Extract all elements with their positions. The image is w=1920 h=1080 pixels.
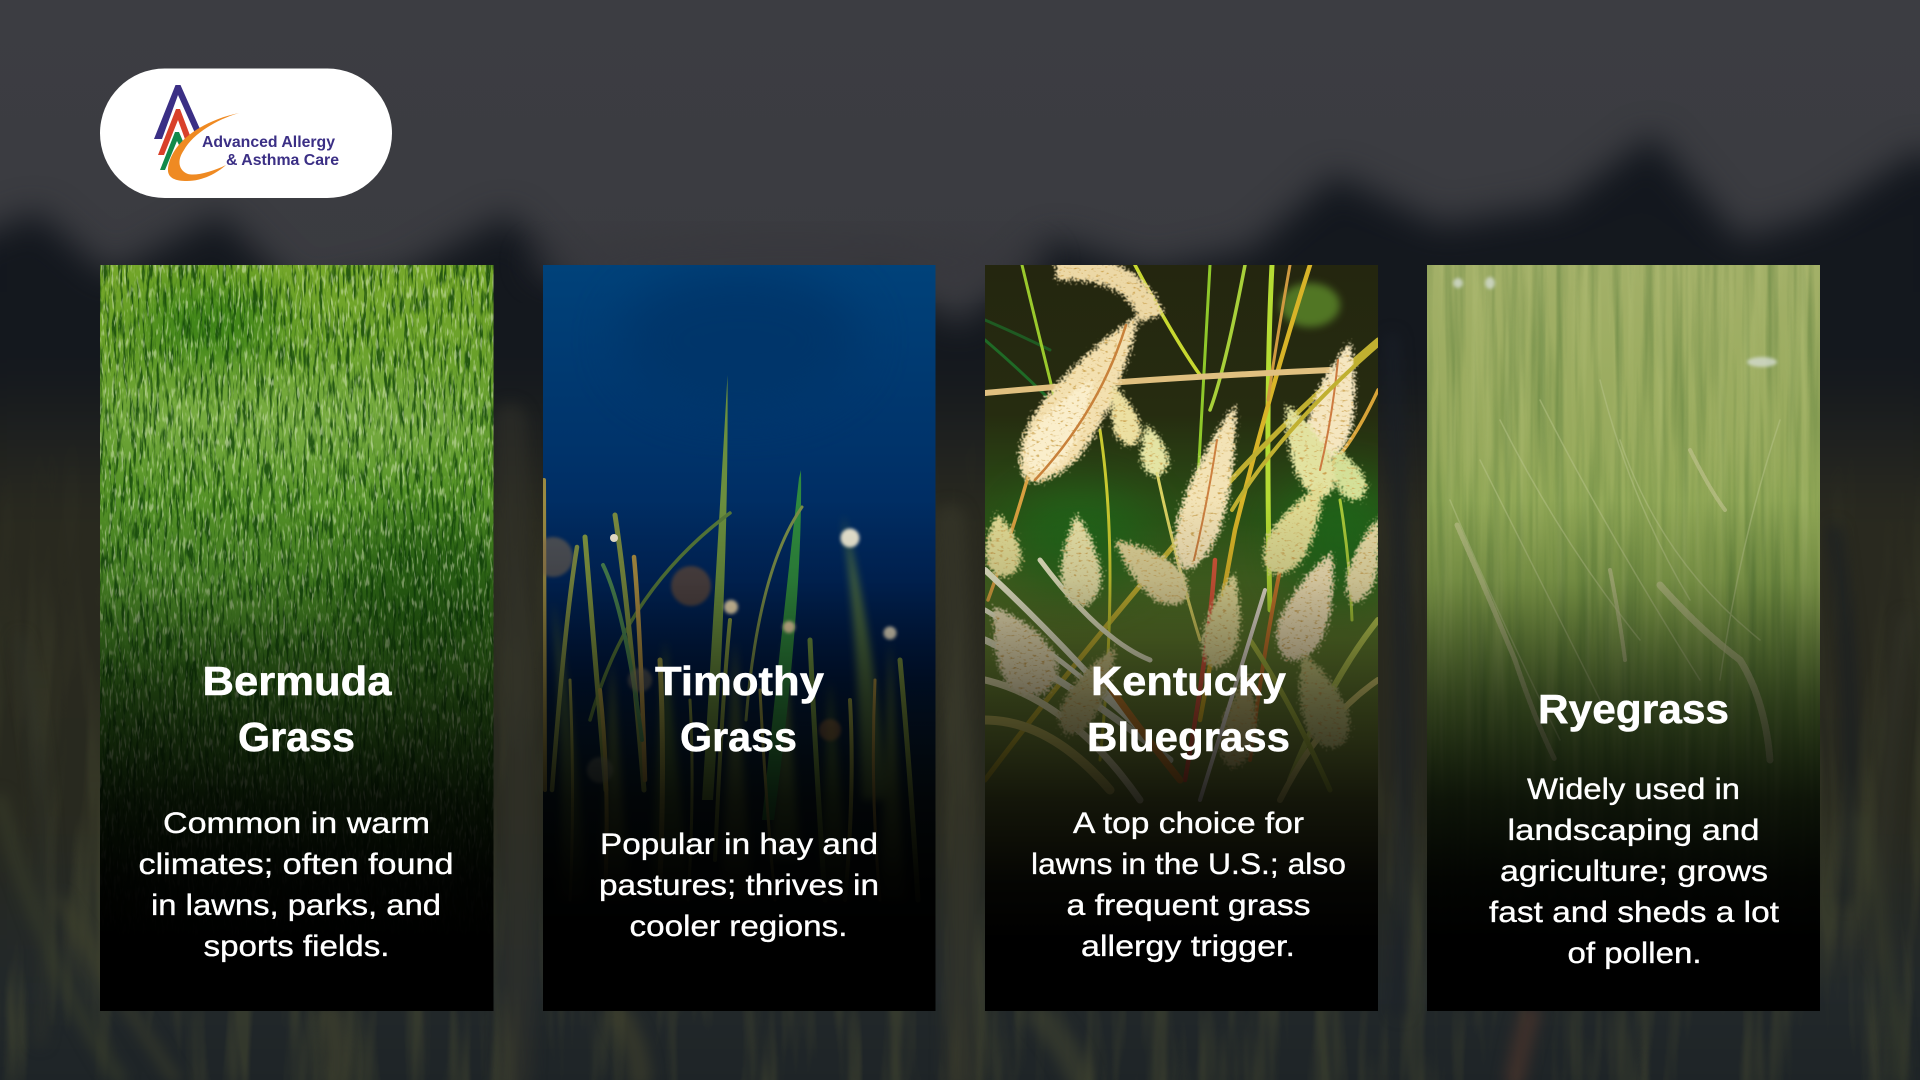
description: Ryegrass (1489, 773, 1780, 970)
description: Bermuda Grass: in lawns, parks, and (151, 889, 441, 922)
heading: Timothy Grass: Timothy (655, 658, 824, 704)
icon: nested peaks and swoosh (154, 85, 239, 181)
description: Kentucky Bluegrass: a frequent grass (1066, 889, 1310, 922)
seed heads (971, 268, 1392, 770)
photo: lawn (80, 265, 510, 1011)
heading: Timothy Grass: Grass (680, 714, 797, 760)
soft blurred blades (0, 340, 1905, 1080)
description: Kentucky Bluegrass: lawns in the U.S.; also (1031, 848, 1346, 881)
description: Timothy Grass: Popular in hay and (600, 828, 878, 861)
photo: feathery seed heads (971, 265, 1400, 1011)
panel: Kentucky Bluegrass (971, 265, 1400, 1011)
logo wordmark: Advanced Allergy (202, 134, 335, 151)
description: Kentucky Bluegrass: A top choice for (1073, 807, 1304, 840)
photo: blades against blue (533, 265, 936, 1011)
description: Bermuda Grass: climates; often found (138, 848, 454, 881)
description: Ryegrass: of pollen. (1568, 937, 1702, 970)
logo wordmark (202, 134, 339, 169)
heading: Ryegrass: Ryegrass (1538, 686, 1729, 732)
photo: soft green rye field (1427, 265, 1820, 1011)
heading: Kentucky Bluegrass: Kentucky (1091, 658, 1286, 704)
description: Timothy Grass: cooler regions. (630, 910, 848, 943)
description: Kentucky Bluegrass: allergy trigger. (1081, 930, 1295, 963)
description: Ryegrass: landscaping and (1508, 814, 1760, 847)
heading: Timothy Grass (655, 658, 824, 760)
heading: Bermuda Grass (202, 658, 393, 760)
description: Ryegrass: agriculture; grows (1500, 855, 1768, 888)
panel: Bermuda Grass (80, 265, 510, 1011)
description: Timothy Grass: pastures; thrives in (599, 869, 879, 902)
logo wordmark: & Asthma Care (226, 152, 339, 169)
heading: Kentucky Bluegrass (1087, 658, 1290, 760)
heading: Bermuda Grass: Bermuda (202, 658, 393, 704)
description: Bermuda Grass: Common in warm (163, 807, 430, 840)
heading: Bermuda Grass: Grass (238, 714, 355, 760)
description: Timothy Grass (599, 828, 879, 943)
description: Ryegrass: fast and sheds a lot (1489, 896, 1780, 929)
description: Kentucky Bluegrass (1031, 807, 1346, 963)
description: Bermuda Grass (138, 807, 454, 963)
heading: Kentucky Bluegrass: Bluegrass (1087, 714, 1290, 760)
logo: Advanced Allergy & Asthma Care (100, 68, 392, 198)
description: Ryegrass: Widely used in (1527, 773, 1740, 806)
panel: Ryegrass (1427, 265, 1820, 1011)
panel: Timothy Grass (533, 265, 936, 1011)
stems (985, 265, 1378, 800)
bokeh dew drops (533, 528, 896, 783)
description: Bermuda Grass: sports fields. (204, 930, 390, 963)
